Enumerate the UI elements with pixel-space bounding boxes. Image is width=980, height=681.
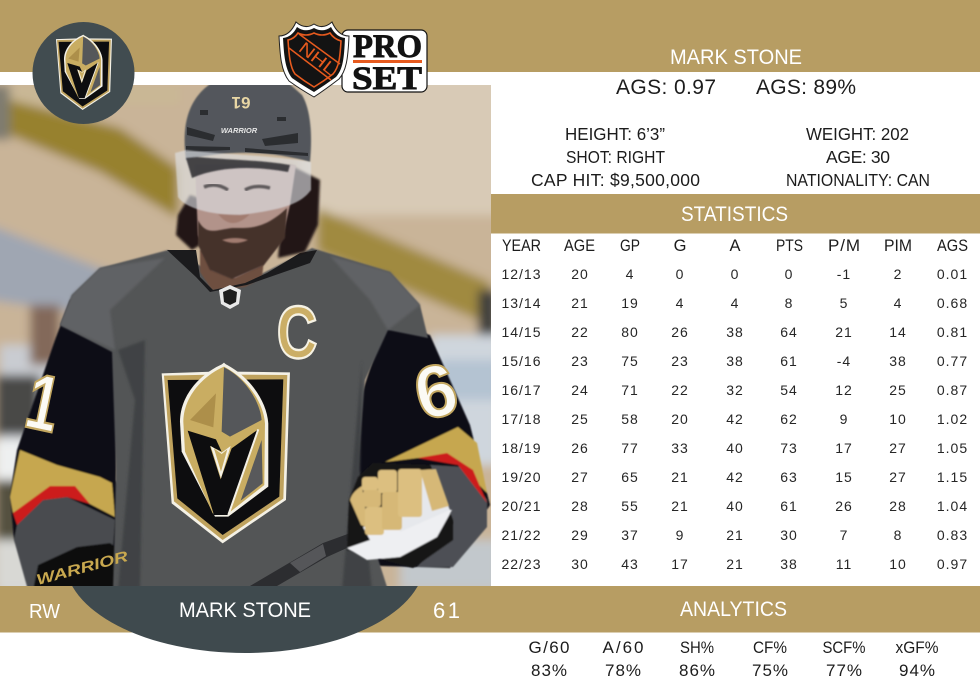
row 15/16: 23	[571, 353, 589, 369]
row 18/19: 26	[571, 440, 589, 456]
row 12/13: 12/13	[501, 266, 542, 282]
row 16/17: 32	[726, 382, 744, 398]
row 22/23: 11	[836, 556, 852, 572]
row 20/21: 61	[780, 498, 798, 514]
table header row: PTS	[776, 237, 803, 255]
row 19/20: 1.15	[937, 469, 968, 485]
hockey stick	[250, 534, 348, 586]
set wordmark: SET	[352, 61, 422, 97]
nameplate arc	[72, 586, 418, 653]
row 18/19: 40	[726, 440, 744, 456]
row 15/16: 0.77	[937, 353, 968, 369]
row 16/17: 0.87	[937, 382, 968, 398]
jersey shading	[118, 340, 372, 590]
logo plate	[342, 30, 427, 92]
metric labels: G/60	[528, 638, 570, 657]
row 12/13: 20	[571, 266, 589, 282]
row 16/17: 22	[671, 382, 689, 398]
jersey number: 61	[433, 598, 460, 623]
nhl shield	[279, 22, 349, 97]
row 17/18: 25	[571, 411, 589, 427]
row 14/15: 21	[835, 324, 853, 340]
row 13/14: 13/14	[501, 295, 542, 311]
left red stripe	[13, 486, 90, 525]
row 18/19: 18/19	[501, 440, 542, 456]
player bio left column: CAP HIT: $9,500,000	[531, 170, 700, 190]
row 12/13: 0	[785, 266, 793, 282]
left cuff	[13, 496, 116, 586]
row 21/22: 21/22	[501, 527, 542, 543]
row 20/21: 40	[726, 498, 744, 514]
metric labels	[528, 638, 939, 657]
row 15/16: 38	[726, 353, 744, 369]
row 17/18: 20	[671, 411, 689, 427]
statistics band	[491, 194, 980, 234]
row 14/15	[501, 324, 968, 340]
player bio left column	[531, 124, 700, 190]
player bio left column: HEIGHT: 6’3”	[565, 124, 665, 144]
metric labels: SH%	[680, 639, 714, 657]
helmet	[185, 80, 311, 162]
player bio left column: SHOT: RIGHT	[566, 147, 665, 167]
table header row: YEAR	[502, 237, 541, 255]
row 12/13: 2	[894, 266, 902, 282]
metric values: 94%	[899, 661, 935, 680]
row 19/20: 65	[621, 469, 639, 485]
row 12/13: 0	[731, 266, 739, 282]
row 22/23: 22/23	[501, 556, 542, 572]
face	[195, 165, 296, 278]
left glove	[33, 542, 115, 586]
player bio right column: NATIONALITY: CAN	[786, 170, 930, 190]
beard	[198, 208, 287, 279]
row 20/21: 21	[671, 498, 689, 514]
row 14/15: 38	[726, 324, 744, 340]
row 15/16: 23	[671, 353, 689, 369]
row 16/17: 25	[889, 382, 907, 398]
row 22/23: 38	[780, 556, 798, 572]
row 15/16: 15/16	[501, 353, 542, 369]
nameplate player name: MARK STONE	[179, 599, 311, 622]
left sleeve	[9, 300, 117, 586]
helmet brand: WARRIOR	[221, 126, 258, 135]
neck	[200, 250, 265, 290]
top gold banner	[0, 0, 980, 72]
row 12/13: 0	[676, 266, 684, 282]
overall ratings: AGS: 0.97	[616, 76, 716, 99]
left gold band	[10, 450, 115, 517]
player photo	[0, 75, 510, 595]
helmet number: 61	[232, 93, 250, 112]
row 15/16: 38	[889, 353, 907, 369]
analytics band	[0, 586, 980, 632]
jersey collar	[167, 250, 317, 292]
row 22/23: 17	[671, 556, 689, 572]
row 19/20: 15	[835, 469, 853, 485]
row 14/15: 26	[671, 324, 689, 340]
row 17/18: 62	[780, 411, 798, 427]
position label: RW	[29, 601, 60, 623]
table header row: P/M	[828, 236, 860, 255]
table header row: AGE	[564, 237, 595, 255]
row 17/18: 17/18	[501, 411, 542, 427]
row 21/22: 21	[726, 527, 744, 543]
hair	[176, 165, 320, 258]
row 22/23: 43	[621, 556, 639, 572]
row 21/22	[501, 527, 968, 543]
row 14/15: 0.81	[937, 324, 968, 340]
right glove	[347, 463, 453, 568]
metric values	[531, 661, 935, 680]
statistics table	[501, 236, 968, 572]
nhl shield: NHL	[295, 38, 340, 79]
left glove brand: WARRIOR	[35, 548, 130, 589]
right cuff	[417, 465, 487, 567]
row 22/23	[501, 556, 968, 572]
analytics heading: ANALYTICS	[680, 598, 787, 621]
row 18/19: 77	[621, 440, 639, 456]
row 18/19: 27	[889, 440, 907, 456]
row 20/21: 55	[621, 498, 639, 514]
row 13/14: 8	[785, 295, 793, 311]
header player name: MARK STONE	[670, 46, 802, 69]
row 12/13: 4	[626, 266, 634, 282]
row 18/19: 73	[780, 440, 798, 456]
row 15/16: -4	[837, 353, 851, 369]
metric labels: SCF%	[822, 639, 866, 657]
row 15/16: 61	[780, 353, 798, 369]
row 20/21: 28	[889, 498, 907, 514]
row 22/23: 0.97	[937, 556, 968, 572]
mouth and nose	[218, 214, 250, 243]
sleeve number right: 6	[406, 346, 466, 437]
metric values: 86%	[679, 661, 715, 680]
row 21/22: 30	[780, 527, 798, 543]
row 16/17: 16/17	[501, 382, 542, 398]
row 21/22: 9	[676, 527, 684, 543]
row 22/23: 30	[571, 556, 589, 572]
row 17/18: 9	[840, 411, 848, 427]
metric values: 77%	[826, 661, 862, 680]
row 22/23: 10	[889, 556, 907, 572]
row 20/21: 20/21	[501, 498, 542, 514]
overall ratings	[616, 76, 856, 99]
row 15/16: 75	[621, 353, 639, 369]
player bio right column: WEIGHT: 202	[806, 124, 909, 144]
table header row	[502, 236, 968, 255]
helmet vents	[186, 110, 308, 156]
row 13/14: 4	[676, 295, 684, 311]
row 19/20: 42	[726, 469, 744, 485]
metric values: 78%	[605, 661, 641, 680]
row 17/18: 42	[726, 411, 744, 427]
eyes	[204, 185, 270, 190]
row 15/16	[501, 353, 968, 369]
row 16/17: 54	[780, 382, 798, 398]
orange rule	[353, 60, 422, 63]
row 16/17: 12	[835, 382, 853, 398]
row 13/14: 21	[571, 295, 589, 311]
analytics metrics	[528, 638, 939, 680]
row 14/15: 22	[571, 324, 589, 340]
row 21/22: 0.83	[937, 527, 968, 543]
row 19/20: 21	[671, 469, 689, 485]
glove fingers	[350, 486, 368, 528]
row 17/18: 1.02	[937, 411, 968, 427]
row 20/21: 28	[571, 498, 589, 514]
row 19/20	[501, 469, 968, 485]
table header row: A	[729, 237, 741, 255]
row 21/22: 7	[840, 527, 848, 543]
row 13/14: 5	[840, 295, 848, 311]
arena background	[0, 75, 510, 595]
row 18/19: 33	[671, 440, 689, 456]
pro wordmark: PRO	[353, 29, 422, 65]
row 14/15: 14	[889, 324, 907, 340]
pro set logo	[279, 22, 427, 97]
row 16/17: 71	[621, 382, 639, 398]
row 14/15: 14/15	[501, 324, 542, 340]
player bio right column	[786, 124, 930, 190]
player bio right column: AGE: 30	[826, 147, 890, 167]
metric labels: xGF%	[896, 639, 939, 657]
row 13/14	[501, 295, 968, 311]
row 16/17	[501, 382, 968, 398]
row 19/20: 63	[780, 469, 798, 485]
row 19/20: 27	[571, 469, 589, 485]
team logo badge	[32, 22, 134, 124]
row 18/19: 17	[835, 440, 853, 456]
row 20/21: 1.04	[937, 498, 968, 514]
row 17/18	[501, 411, 968, 427]
row 16/17: 24	[571, 382, 589, 398]
sleeve number left: 1	[18, 356, 68, 449]
row 12/13: 0.01	[937, 266, 968, 282]
visor dark band	[186, 157, 290, 178]
row 13/14: 4	[894, 295, 902, 311]
right sleeve	[350, 322, 490, 568]
row 20/21: 26	[835, 498, 853, 514]
row 20/21	[501, 498, 968, 514]
row 13/14: 4	[731, 295, 739, 311]
captain letter: C	[277, 292, 317, 374]
right gold band	[385, 427, 487, 493]
row 13/14: 0.68	[937, 295, 968, 311]
overall ratings: AGS: 89%	[756, 76, 856, 99]
row 12/13: -1	[837, 266, 851, 282]
metric labels: A/60	[602, 638, 644, 657]
metric values: 75%	[752, 661, 788, 680]
visor	[175, 150, 311, 215]
row 12/13	[501, 266, 968, 282]
row 22/23: 21	[726, 556, 744, 572]
row 21/22: 37	[621, 527, 639, 543]
right red stripe	[418, 453, 487, 503]
row 19/20: 19/20	[501, 469, 542, 485]
table header row: G	[674, 237, 686, 255]
metric values: 83%	[531, 661, 567, 680]
glove palm	[347, 507, 452, 560]
row 14/15: 80	[621, 324, 639, 340]
table header row: GP	[620, 237, 640, 255]
row 21/22: 8	[894, 527, 902, 543]
statistics band: STATISTICS	[681, 203, 788, 226]
row 21/22: 29	[571, 527, 589, 543]
table header row: AGS	[937, 237, 968, 255]
jersey crest	[162, 363, 290, 543]
row 14/15: 64	[780, 324, 798, 340]
metric labels: CF%	[753, 639, 787, 657]
nhl patch	[219, 285, 241, 309]
row 17/18: 58	[621, 411, 639, 427]
table header row: PIM	[884, 237, 912, 255]
row 18/19: 1.05	[937, 440, 968, 456]
row 17/18: 10	[889, 411, 907, 427]
jersey torso	[60, 248, 428, 590]
row 18/19	[501, 440, 968, 456]
row 13/14: 19	[621, 295, 639, 311]
row 19/20: 27	[889, 469, 907, 485]
